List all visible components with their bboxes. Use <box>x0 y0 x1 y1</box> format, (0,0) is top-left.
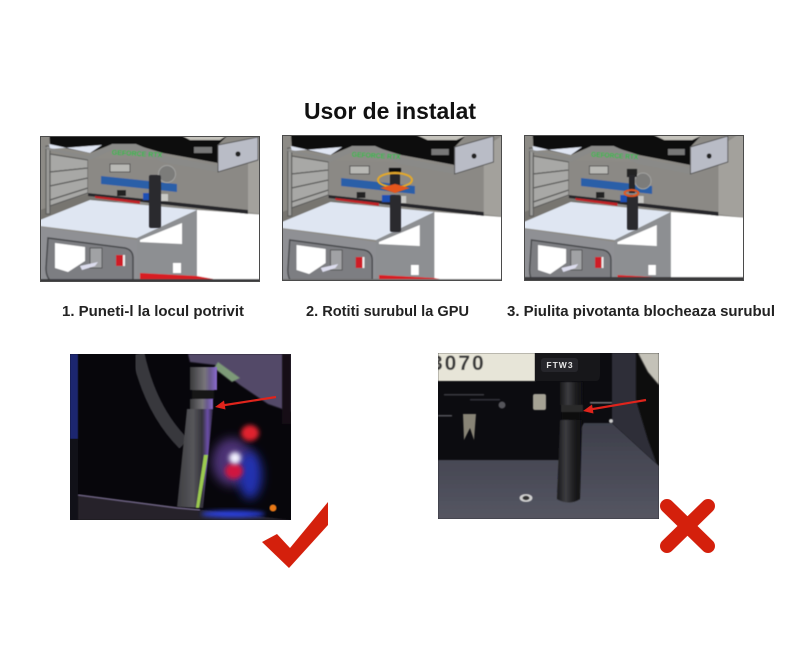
rear wall <box>612 353 659 466</box>
icon: red check mark <box>262 502 328 568</box>
background lights <box>212 425 276 512</box>
panel: step 3 diagram <box>524 128 748 284</box>
white card label <box>431 352 535 381</box>
floor <box>78 495 291 520</box>
caption: step 1: 1. Puneti-l la locul potrivit <box>62 304 244 320</box>
caption: step 2: 2. Rotiti surubul la GPU <box>306 304 469 320</box>
arrow: incorrect photo pointer <box>583 400 646 414</box>
panel: step 1 diagram <box>40 136 260 282</box>
photo: incorrect installation <box>431 352 659 519</box>
arrow: correct photo pointer <box>215 397 276 410</box>
title: Usor de instalat <box>304 98 476 124</box>
screw standoff <box>149 166 176 228</box>
black card bracket: FTW3 <box>546 360 574 370</box>
pcb details <box>438 394 613 440</box>
white card label: 3070 <box>431 352 486 375</box>
floor <box>438 423 659 519</box>
photo: correct installation <box>70 354 291 520</box>
panel: step 2 diagram <box>282 135 502 281</box>
panel: step 2 diagram: GEFORCE RTX <box>351 152 401 161</box>
standoff <box>177 367 217 508</box>
black card bracket <box>535 353 600 381</box>
panel: step 3 diagram: GEFORCE RTX <box>591 152 639 161</box>
caption: step 3: 3. Piulita pivotanta blocheaza surubul <box>507 304 775 320</box>
standoff <box>557 382 583 502</box>
screw with rotation arrow <box>378 168 412 232</box>
floor screw <box>520 494 532 502</box>
icon: red cross <box>667 506 708 546</box>
screw with locking nut <box>624 169 651 230</box>
panel: step 1 diagram: GEFORCE RTX <box>112 150 163 159</box>
